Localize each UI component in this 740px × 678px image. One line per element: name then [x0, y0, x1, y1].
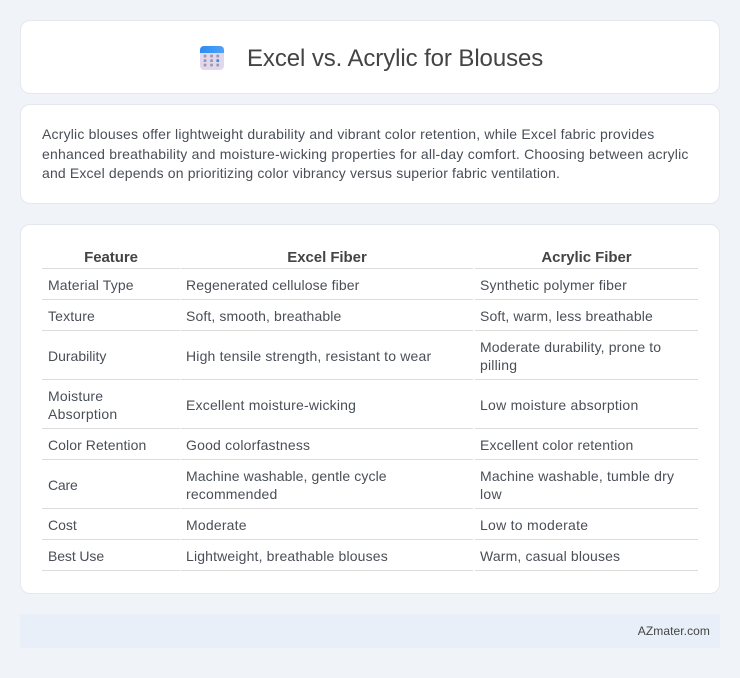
row: best use: Lightweight, breathable blouses: [186, 548, 388, 564]
row: color retention: [48, 437, 633, 453]
row: moisture absorption: [48, 388, 639, 422]
row: material type: [48, 277, 627, 293]
row: cost: Low to moderate: [480, 517, 588, 533]
panel: intro text: [20, 104, 720, 204]
row: texture: Soft, warm, less breathable: [480, 308, 653, 324]
footer credit: AZmater.com: [638, 624, 710, 638]
row: texture: [48, 308, 653, 324]
intro paragraph: and Excel depends on prioritizing color vibrancy versus superior fabric ventilation.: [42, 165, 560, 181]
row: texture: Texture: [48, 308, 95, 324]
row: moisture absorption: Low moisture absorption: [480, 397, 639, 413]
row: durability: [48, 339, 661, 373]
table header row: Excel Fiber: [287, 249, 367, 266]
row: color retention: Excellent color retention: [480, 437, 633, 453]
row: material type: Regenerated cellulose fiber: [186, 277, 359, 293]
row: care: recommended: [186, 486, 277, 502]
row: care: [48, 468, 674, 502]
row: color retention: Good colorfastness: [186, 437, 310, 453]
table header row: [84, 249, 632, 266]
row: durability: High tensile strength, resistant to wear: [186, 348, 431, 364]
row: color retention: Color Retention: [48, 437, 146, 453]
icon: calendar: [200, 46, 224, 70]
row: best use: Best Use: [48, 548, 104, 564]
row: moisture absorption: Absorption: [48, 406, 117, 422]
row: material type: Material Type: [48, 277, 134, 293]
row: durability: Durability: [48, 348, 106, 364]
intro paragraph: enhanced breathability and moisture-wicking properties for all-day comfort. Choosing between acrylic: [42, 146, 689, 162]
row: care: Care: [48, 477, 78, 493]
row: cost: Moderate: [186, 517, 247, 533]
table header row: Acrylic Fiber: [541, 249, 632, 266]
intro paragraph: Acrylic blouses offer lightweight durability and vibrant color retention, while Excel fabric provides: [42, 126, 654, 142]
row: best use: Warm, casual blouses: [480, 548, 620, 564]
row: cost: Cost: [48, 517, 77, 533]
row: cost: [48, 517, 588, 533]
row: moisture absorption: Excellent moisture-wicking: [186, 397, 356, 413]
row: care: Machine washable, gentle cycle: [186, 468, 387, 484]
intro paragraph: [42, 126, 689, 181]
row: care: low: [480, 486, 502, 502]
row: material type: Synthetic polymer fiber: [480, 277, 627, 293]
row: texture: Soft, smooth, breathable: [186, 308, 341, 324]
row: durability: pilling: [480, 357, 517, 373]
title: Excel vs. Acrylic for Blouses: [247, 45, 543, 72]
row: care: Machine washable, tumble dry: [480, 468, 674, 484]
row: best use: [48, 548, 620, 564]
panel: comparison table: [20, 224, 720, 594]
row: durability: Moderate durability, prone to: [480, 339, 661, 355]
table header row: Feature: [84, 249, 138, 266]
panel: header: [20, 20, 720, 94]
row: moisture absorption: Moisture: [48, 388, 103, 404]
footer bar: [20, 614, 720, 648]
